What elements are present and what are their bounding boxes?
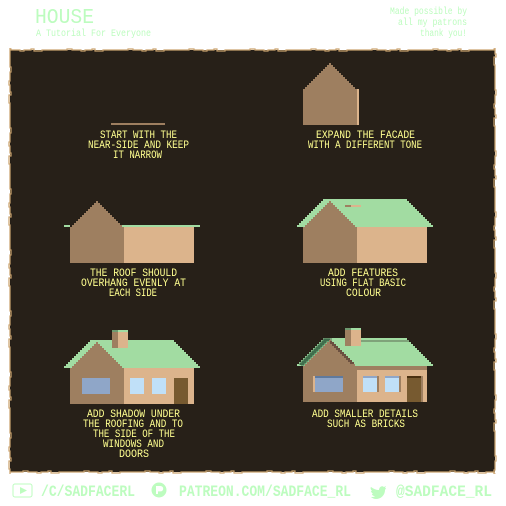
large window with shadow <box>313 376 343 392</box>
caption 4 <box>320 268 406 300</box>
roof <box>297 338 433 366</box>
caption 5: THE ROOFING AND TO <box>83 419 183 431</box>
caption 3: THE ROOF SHOULD <box>90 268 177 280</box>
large window <box>82 378 110 394</box>
patreon link: PATREON.COM/SADFACE_RL <box>179 483 351 501</box>
caption 6: ADD SMALLER DETAILS <box>312 409 418 421</box>
step 4 <box>297 199 433 300</box>
icon: youtube <box>13 484 32 497</box>
small windows <box>130 378 166 394</box>
gable <box>70 342 124 404</box>
chimney <box>112 330 128 348</box>
caption 3: OVERHANG EVENLY AT <box>81 278 186 290</box>
tan wall <box>357 366 427 402</box>
step 2 <box>303 63 422 152</box>
door <box>174 378 188 404</box>
chimney stub <box>345 205 361 207</box>
twitter handle: @SADFACE_RL <box>396 483 492 501</box>
step 6 <box>297 328 433 431</box>
gable <box>303 340 357 402</box>
near-side line <box>111 123 165 125</box>
gable <box>303 201 357 263</box>
side strip <box>357 89 359 125</box>
caption 2: EXPAND THE FACADE <box>316 130 415 142</box>
facade <box>303 63 357 125</box>
icon: twitter <box>371 486 386 499</box>
caption 1: START WITH THE <box>100 130 177 142</box>
caption 5: THE SIDE OF THE <box>93 429 175 441</box>
caption 4: USING FLAT BASIC <box>320 278 406 290</box>
tan wall <box>124 368 194 404</box>
caption 2 <box>308 130 422 152</box>
icon: patreon <box>152 482 166 498</box>
caption 3: EACH SIDE <box>109 288 157 300</box>
caption 5: DOORS <box>119 449 149 461</box>
tan wall <box>357 227 427 263</box>
chimney <box>345 328 361 346</box>
caption 3 <box>81 268 186 300</box>
caption 1: IT NARROW <box>113 150 162 162</box>
caption 5: ADD SHADOW UNDER <box>87 409 180 421</box>
patron thanks: thank you! <box>420 28 467 40</box>
caption 6: SUCH AS BRICKS <box>327 419 405 431</box>
patron thanks: Made possible by <box>390 6 467 18</box>
roof <box>297 199 433 227</box>
roof shadow strips <box>323 338 409 342</box>
footer <box>13 482 492 501</box>
patron thanks <box>390 6 467 40</box>
youtube channel: /C/SADFACERL <box>41 483 135 501</box>
small windows with shadow <box>363 376 401 392</box>
caption 5 <box>83 409 183 461</box>
caption 1: NEAR-SIDE AND KEEP <box>88 140 189 152</box>
caption 1 <box>88 130 189 162</box>
caption 4: ADD FEATURES <box>328 268 398 280</box>
gable edge <box>331 341 353 364</box>
patron thanks: all my patrons <box>398 17 467 29</box>
caption 4: COLOUR <box>346 288 381 300</box>
step 3 <box>64 201 200 300</box>
door with shadow <box>407 376 423 402</box>
step 1 <box>88 123 189 162</box>
caption 6 <box>312 409 418 431</box>
eave shadow <box>357 366 427 370</box>
left roof shading <box>301 340 330 365</box>
caption 5: WINDOWS AND <box>103 439 164 451</box>
gable <box>70 201 124 263</box>
tan wall <box>124 227 194 263</box>
roof overhang <box>64 225 200 227</box>
title: HOUSE <box>35 7 94 30</box>
roof <box>64 340 200 368</box>
caption 2: WITH A DIFFERENT TONE <box>308 140 422 152</box>
step 5 <box>64 330 200 461</box>
subtitle: A Tutorial For Everyone <box>36 28 151 40</box>
